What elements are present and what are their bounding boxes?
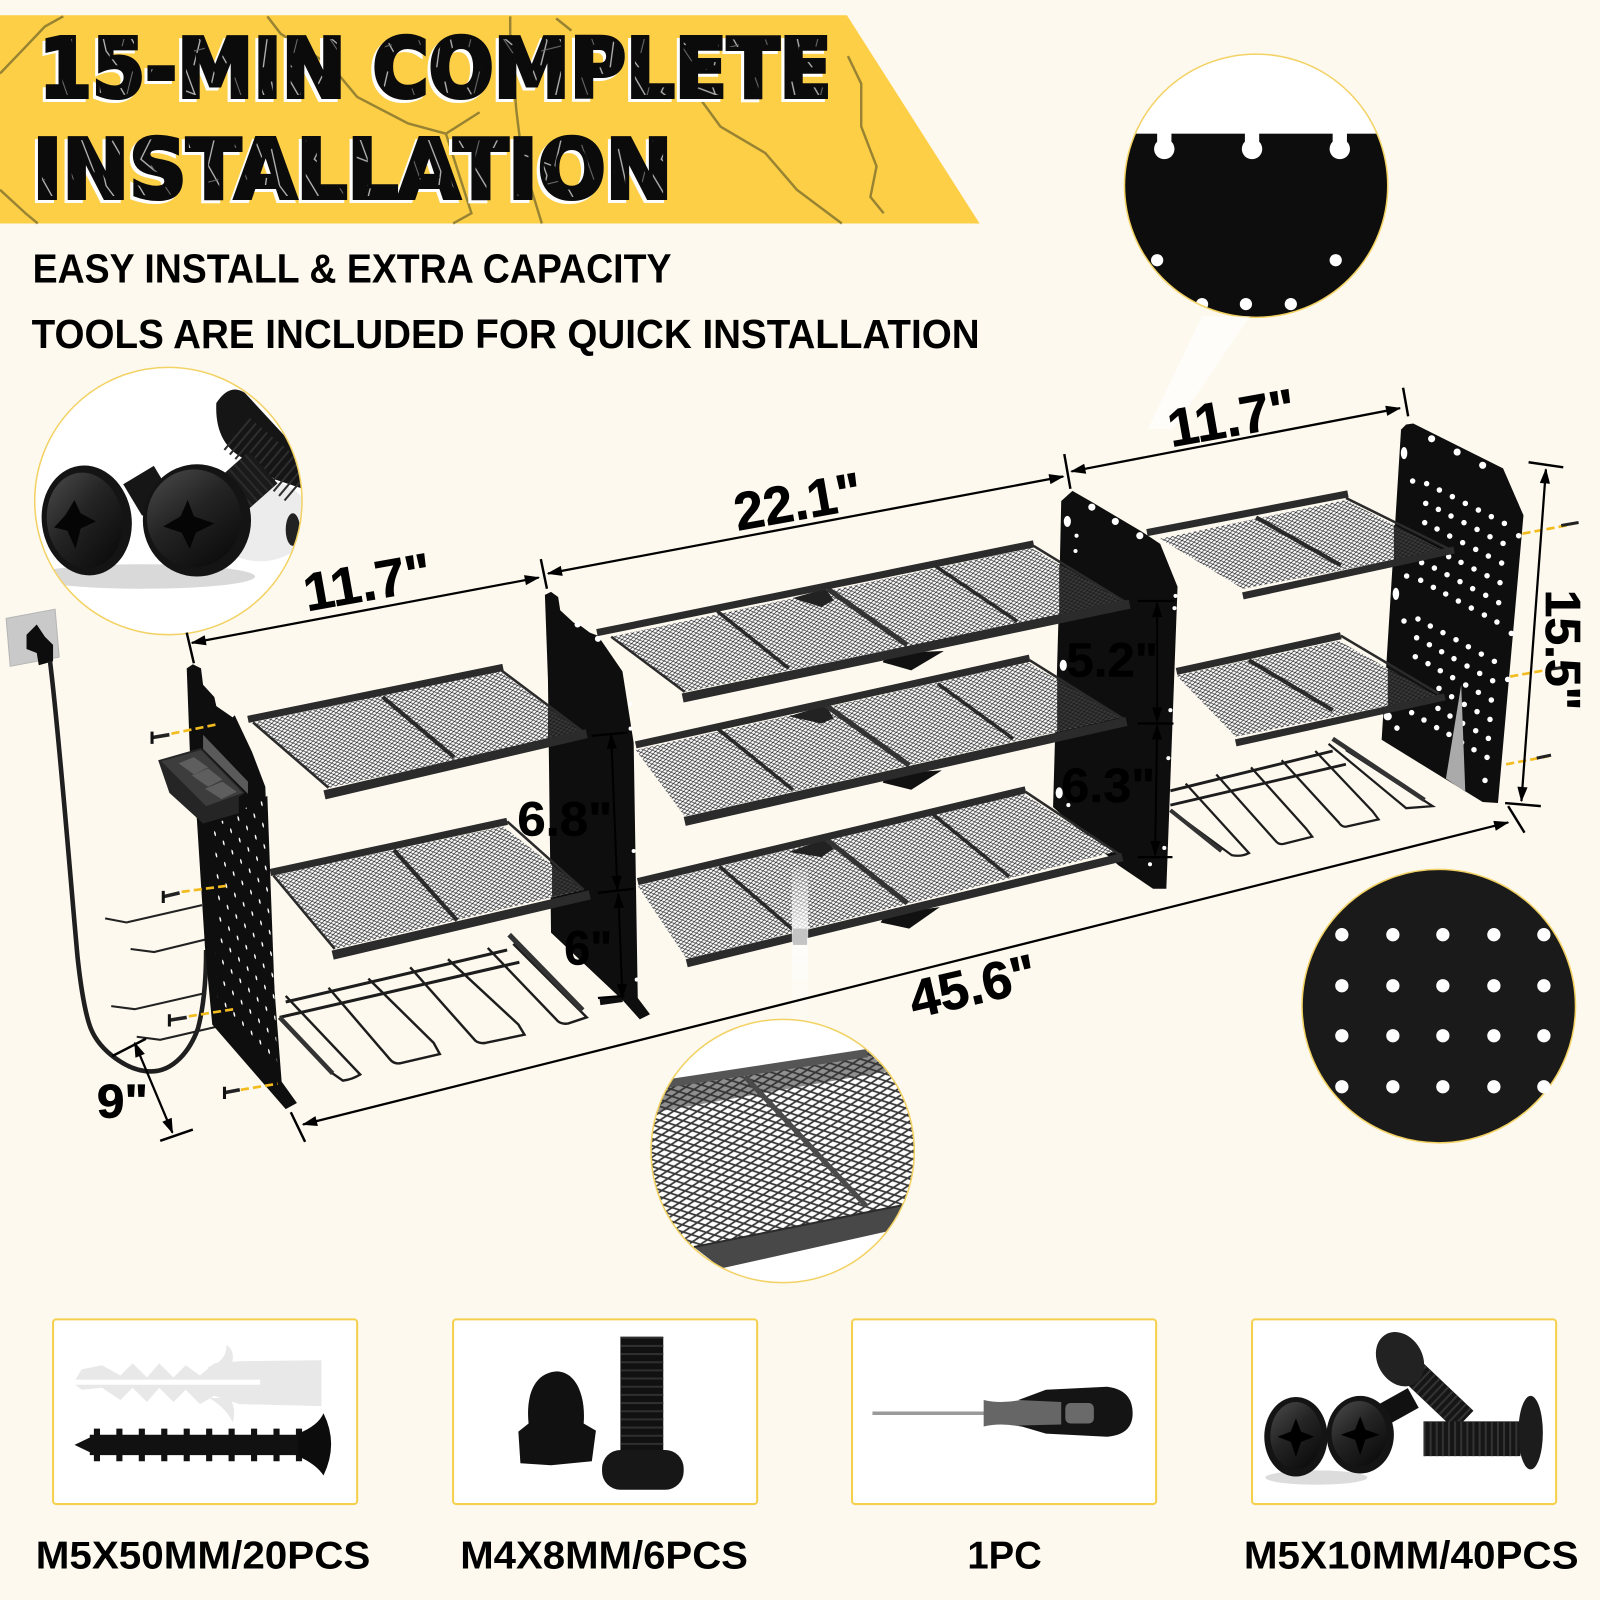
dimension: 15.5 height	[1505, 462, 1589, 806]
dimension: 6.3	[1061, 726, 1172, 857]
banner: title	[0, 15, 980, 223]
label: M5X10MM/40PCS: M5X10MM/40PCS	[1244, 1534, 1579, 1577]
panel: cap nut and bolt	[453, 1319, 757, 1504]
right pegboard panel	[1382, 423, 1523, 803]
banner: title: 15-MIN COMPLETE	[36, 25, 829, 120]
banner: title: INSTALLATION	[30, 126, 669, 221]
power cord	[50, 661, 206, 1071]
right shelf lower	[1177, 636, 1445, 743]
left shelf lower	[270, 821, 590, 955]
subheading text block: TOOLS ARE INCLUDED FOR QUICK INSTALLATION	[32, 311, 980, 357]
callout: notch detail circle	[1124, 53, 1388, 318]
banner: title: 15-MIN COMPLETE	[39, 22, 832, 117]
panel: screwdriver	[852, 1319, 1156, 1504]
dimension: 5.2: 5.2"	[1066, 635, 1158, 688]
callout: pegboard detail circle	[1302, 869, 1576, 1143]
panel: M5 bolts	[1252, 1319, 1556, 1504]
dimension: 45.6 total width: 45.6"	[904, 944, 1042, 1030]
left screws with yellow dashes	[151, 724, 278, 1099]
label: M5X50MM/20PCS: M5X50MM/20PCS	[36, 1534, 370, 1577]
left pegboard panel	[187, 664, 297, 1109]
callout beam: notch circle to board	[1148, 316, 1250, 429]
right shelf upper	[1147, 494, 1454, 596]
middle shelf top	[597, 544, 1130, 698]
dimension: 6.8	[517, 733, 634, 893]
middle shelf center	[636, 658, 1127, 821]
dimension: 6	[564, 894, 624, 998]
callout: screw detail circle	[31, 367, 311, 635]
label: M4X8MM/6PCS: M4X8MM/6PCS	[460, 1534, 748, 1577]
dimension: 22.1: 22.1"	[730, 462, 866, 542]
dimension: 6.3: 6.3"	[1061, 760, 1155, 813]
wall outlet and plug	[6, 609, 59, 666]
third pegboard panel	[1053, 491, 1178, 889]
dimension: 11.7 left	[187, 543, 547, 663]
banner: title: INSTALLATION	[33, 123, 672, 218]
icon: black wood screw	[74, 1413, 331, 1476]
middle shelf bottom	[638, 790, 1122, 963]
right screws with yellow dashes	[1506, 522, 1579, 764]
label: 1PC: 1PC	[967, 1534, 1042, 1577]
right wire battery rack	[1170, 739, 1433, 856]
pegboard holes	[1397, 481, 1519, 780]
dimension: 15.5 height: 15.5"	[1535, 590, 1589, 710]
dimension: 11.7 right	[1071, 378, 1408, 471]
icon: cap nut	[518, 1371, 596, 1465]
panel: anchor and screw	[53, 1319, 357, 1504]
power strip	[158, 735, 248, 823]
dimension: 9 depth	[97, 1039, 193, 1141]
dimension: 22.1	[548, 454, 1070, 573]
icon: screwdriver	[872, 1387, 1133, 1437]
dimension: 11.7 right: 11.7"	[1163, 378, 1300, 459]
icon: four bolts	[1264, 1323, 1543, 1485]
icon: plastic anchor	[76, 1345, 321, 1422]
dimension: 11.7 left: 11.7"	[299, 543, 436, 623]
second pegboard panel	[545, 592, 650, 1019]
pegboard hooks	[105, 905, 240, 1040]
dimension: 5.2	[1066, 601, 1174, 723]
dimension: 9 depth: 9"	[97, 1075, 148, 1127]
subheading text block	[32, 246, 980, 357]
left wire battery rack	[280, 935, 587, 1081]
dimension: 6.8: 6.8"	[517, 794, 612, 847]
left shelf upper	[248, 667, 587, 795]
icon: bolt	[602, 1337, 684, 1490]
callout: mesh detail circle	[643, 1019, 923, 1283]
dimension: 45.6 total width	[291, 806, 1524, 1142]
dimension: 6: 6"	[564, 922, 612, 975]
light beam over bottom shelf	[792, 867, 808, 1020]
subheading text block: EASY INSTALL & EXTRA CAPACITY	[33, 246, 671, 292]
